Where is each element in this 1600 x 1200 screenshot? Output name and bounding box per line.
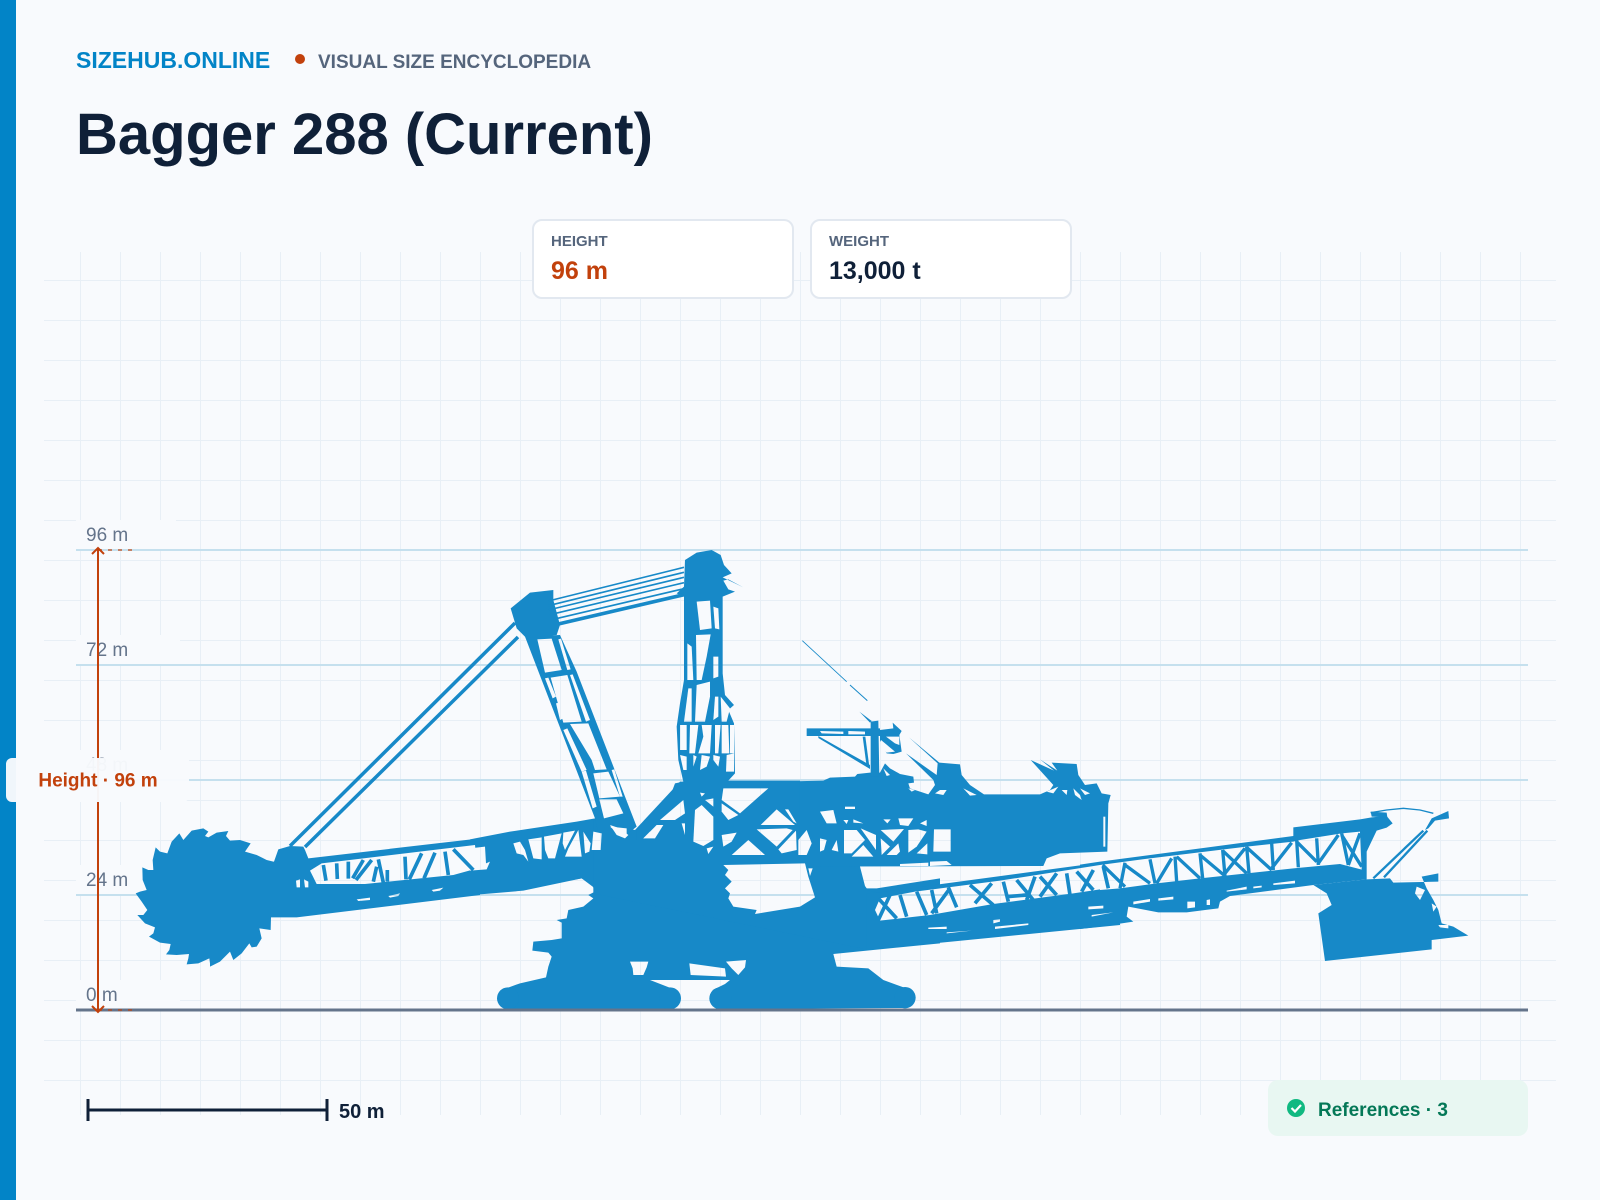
references badge: [1268, 1080, 1528, 1136]
arm inner section: [470, 818, 596, 888]
stat card: height: [532, 219, 794, 299]
boom lattice right: [1103, 832, 1363, 888]
axis labels: 0 m: [86, 985, 118, 1006]
discharge boom upper span: [1080, 816, 1393, 929]
stat card: weight: WEIGHT: [829, 233, 889, 250]
thin deck cables: [802, 641, 867, 701]
support stays to wheel: [290, 623, 518, 847]
height reference lines: [76, 550, 1528, 895]
height label: [6, 758, 189, 802]
axis labels: [86, 525, 128, 1006]
left accent bar: [0, 0, 16, 1200]
bucket wheel and arm: [136, 828, 480, 967]
ground line: [76, 1008, 1528, 1012]
excavator silhouette: [136, 550, 1468, 1009]
discharge hopper: [1313, 873, 1468, 961]
stat card: weight: 13,000 t: [829, 257, 921, 285]
small deck truss: [807, 712, 902, 777]
counterweight deck: [780, 737, 1111, 867]
brand separator dot: [295, 54, 305, 64]
bucket wheel disc: [148, 840, 262, 954]
boom end struts and tip: [1371, 808, 1449, 878]
background grid: [44, 252, 1556, 1115]
axis labels: 72 m: [86, 640, 128, 661]
axis labels: 48 m: [86, 755, 128, 776]
A-frame apex block: [511, 590, 560, 638]
crawler base and body: [480, 860, 940, 1009]
height arrow: [92, 548, 134, 1012]
stat card: height: 96 m: [551, 257, 608, 285]
brand name: SIZEHUB.ONLINE: [76, 47, 270, 73]
arm lattice: [323, 849, 473, 883]
title: Bagger 288 (Current): [76, 102, 653, 167]
stat card: height: HEIGHT: [551, 233, 608, 250]
A-frame leg: [525, 635, 637, 840]
height label: Height · 96 m: [38, 770, 158, 792]
crawler end rollers: [497, 987, 916, 1009]
boom lattice left: [878, 867, 1108, 920]
stat card: weight: [810, 219, 1072, 299]
tower mast: [672, 550, 800, 790]
axis labels: 96 m: [86, 525, 128, 546]
central deck: [593, 782, 867, 892]
tagline: VISUAL SIZE ENCYCLOPEDIA: [318, 52, 591, 73]
discharge boom lower span: [940, 865, 1120, 943]
axis labels: 24 m: [86, 870, 128, 891]
icon: check circle: [1287, 1099, 1305, 1117]
scale bar: 50 m: [339, 1101, 385, 1123]
references badge: References · 3: [1318, 1100, 1448, 1121]
size chart: [6, 252, 1556, 1136]
cable bundle between apex and tower: [548, 567, 684, 624]
